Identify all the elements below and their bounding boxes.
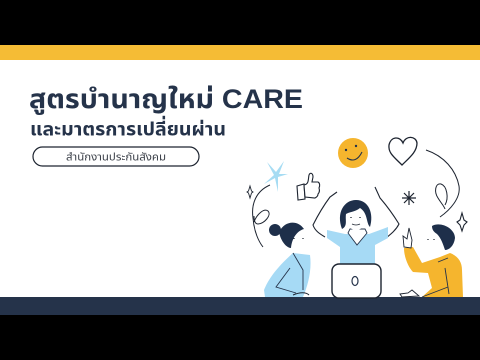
person: left woman: [264, 223, 311, 297]
icon: smiley: [338, 138, 368, 168]
top yellow band: [0, 45, 480, 60]
icon: thumbs up: [297, 173, 320, 200]
pill label: office: สำนักงานประกันสังคม: [66, 152, 166, 164]
laptop: [332, 264, 381, 298]
title: สูตรบำนาญใหม่ CARE: [29, 84, 303, 115]
person: right man: [400, 224, 463, 297]
squiggle left: [253, 185, 270, 247]
icon: small diamond right: [457, 213, 467, 231]
person: middle woman: [313, 187, 399, 264]
icon: blue sparkle: [264, 161, 288, 192]
icon: heart: [389, 137, 417, 165]
subtitle: และมาตรการเปลี่ยนผ่าน: [30, 115, 226, 140]
squiggle right: [426, 150, 459, 217]
bottom navy band: [0, 297, 480, 315]
pill label: office: [33, 147, 199, 166]
icon: asterisk star: [402, 191, 416, 205]
white slide background: [0, 45, 480, 315]
icon: small diamond left: [247, 186, 253, 198]
